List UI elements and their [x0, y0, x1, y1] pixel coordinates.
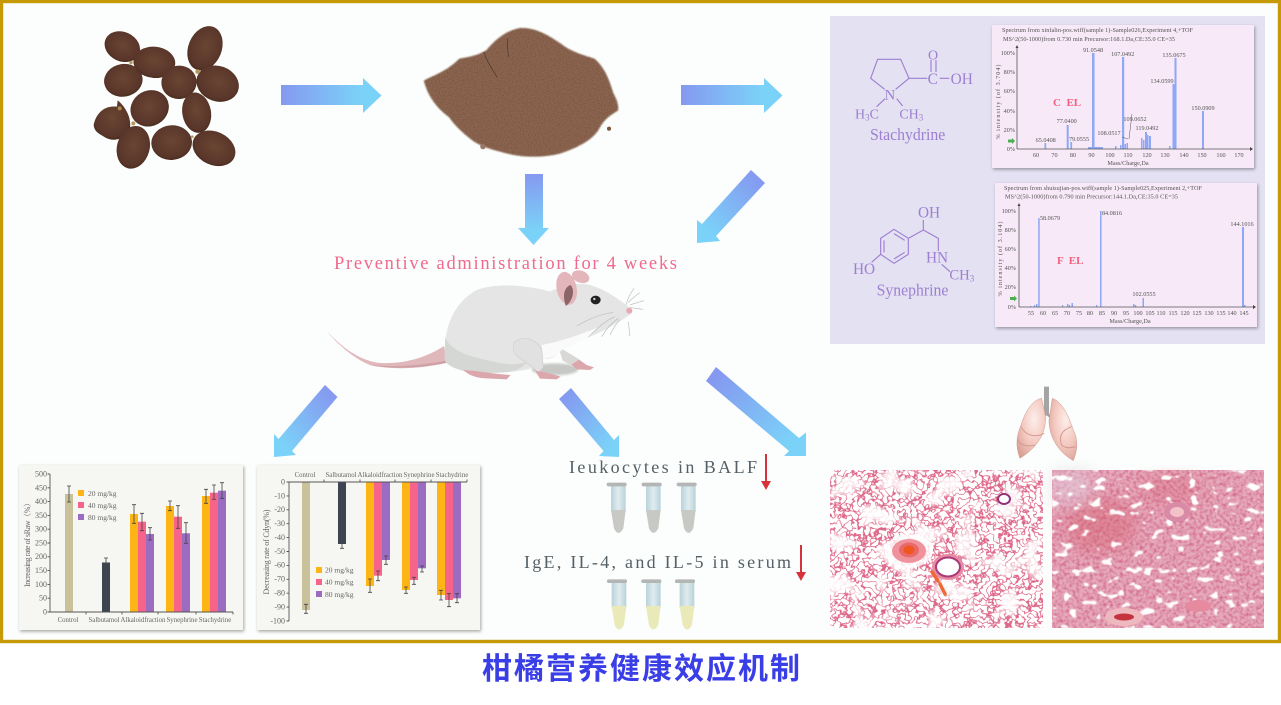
airway ring [932, 554, 964, 580]
mass spectrum: C EL: % intensity (of 3.704) [995, 64, 1002, 140]
mass spectrum: C EL: 134.0599 [1150, 78, 1174, 85]
mass spectrum: F EL: 145 [1239, 310, 1249, 317]
mass spectrum: C EL: 120 [1142, 152, 1152, 159]
mass spectrum: C EL: 100 [1105, 152, 1115, 159]
mass spectrum: C EL: 77.0400 [1057, 118, 1077, 125]
mass spectrum: F EL: 70 [1064, 310, 1070, 317]
mass spectrum: C EL: 80 [1070, 152, 1076, 159]
arrow: compounds to treatment [697, 170, 765, 243]
chart: increasing rate of sRaw: Control [58, 617, 78, 624]
mass spectrum: C EL: 135.0675 [1162, 52, 1186, 59]
mass spectrum: C EL: 119.0492 [1136, 125, 1158, 132]
mass spectrum: F EL: 85 [1099, 310, 1105, 317]
small vessels [932, 572, 945, 594]
mass spectrum: C EL: 91.0548 [1083, 47, 1103, 54]
chart: increasing rate of sRaw: Salbutamol [89, 617, 120, 624]
mass spectrum: F EL: 140 [1227, 310, 1237, 317]
chart: increasing rate of sRaw: 150 [35, 566, 47, 575]
chart: increasing rate of sRaw: Stachydrine [199, 617, 231, 624]
chart: decreasing rate of Cdyn: 0 [281, 478, 285, 486]
mass spectrum: F EL: 75 [1076, 310, 1082, 317]
chemical structure: Stachydrine [855, 48, 973, 144]
title: 柑橘营养健康效应机制 [482, 653, 800, 686]
chart: decreasing rate of Cdyn: -90 [274, 602, 285, 612]
chart: increasing rate of sRaw [19, 465, 243, 630]
mass spectrum: C EL: 65.0408 [1036, 137, 1056, 144]
illustration: laboratory rat [327, 268, 644, 379]
chart: decreasing rate of Cdyn: -30 [274, 519, 285, 528]
chemical structure: Synephrine: 3 [970, 274, 975, 284]
mass spectrum: F EL: Mass/Charge,Da [1109, 318, 1151, 325]
mass spectrum: C EL: 150 [1197, 152, 1207, 159]
mass spectrum: F EL: 125 [1192, 310, 1202, 317]
chemical structure: Stachydrine: 3 [865, 112, 870, 122]
chart: increasing rate of sRaw: 0 [43, 608, 47, 616]
bars: sRaw groups [65, 483, 226, 612]
mass spectrum: F EL: 95 [1123, 310, 1129, 317]
panel: compounds and mass spectra [830, 16, 1265, 344]
bronchiole top [1164, 502, 1190, 522]
arrow: rat to tubes [559, 388, 619, 457]
mass spectrum: C EL: 140 [1179, 152, 1189, 159]
mass spectrum: F EL: 90 [1111, 310, 1117, 317]
chart: decreasing rate of Cdyn: -60 [274, 560, 285, 570]
arrow: powder down to treatment [518, 174, 549, 245]
chemical structure: Stachydrine: N [885, 87, 896, 103]
legend: doses: 80 mg/kg [88, 513, 117, 522]
mass spectrum: F EL: 80 [1087, 310, 1093, 317]
chart: increasing rate of sRaw: 300 [35, 524, 47, 534]
arrow: powder to compounds [681, 78, 782, 113]
chemical structure: Stachydrine: 3 [919, 112, 924, 122]
chart: increasing rate of sRaw: Increasing rate of sRaw（%） [23, 499, 32, 587]
chemical structure: Stachydrine: OH [951, 71, 973, 88]
chart: decreasing rate of Cdyn: -50 [274, 547, 285, 556]
chart: increasing rate of sRaw: 250 [35, 538, 47, 548]
chart: decreasing rate of Cdyn: -20 [274, 505, 285, 514]
vessel with red lumen [892, 539, 926, 563]
mass spectrum: C EL: 20% [1004, 127, 1015, 134]
mass spectrum: F EL: % intensity (of 3.104) [997, 222, 1004, 296]
mass spectrum: C EL: C EL [1053, 97, 1081, 109]
legend: doses Cdyn: 80 mg/kg [325, 590, 354, 599]
image: brown powder pile [424, 28, 618, 157]
legend: doses: 40 mg/kg [88, 501, 117, 510]
mass spectrum: C EL: 130 [1160, 152, 1170, 159]
mass spectrum: F EL: 130 [1204, 310, 1214, 317]
chemical structure: Synephrine: OH [918, 205, 940, 222]
mass spectrum: C EL: 110 [1123, 152, 1133, 159]
mass spectrum: C EL: 150.0909 [1191, 105, 1215, 112]
chart: increasing rate of sRaw: Synephrine [167, 617, 197, 624]
mass spectrum: F EL: 105 [1145, 310, 1155, 317]
mass spectrum: F EL: 40% [1005, 265, 1016, 272]
mass spectrum: F EL: 102.0555 [1132, 291, 1156, 298]
chemical structure: Stachydrine: C [928, 71, 938, 88]
mass spectrum: C EL: 108.0517 [1097, 130, 1121, 137]
mass spectrum: C EL: Mass/Charge,Da [1107, 160, 1149, 167]
legend: doses Cdyn: 40 mg/kg [325, 578, 354, 586]
mass spectrum: F EL: F EL [1057, 255, 1084, 267]
mass spectrum: F EL [995, 183, 1257, 327]
chemical structure: Synephrine: HN [926, 249, 948, 266]
mass spectrum: F EL: 84.0816 [1102, 210, 1122, 217]
chemical structure: Stachydrine: O [928, 48, 938, 63]
mass spectrum: F EL: 65 [1052, 310, 1058, 317]
mass spectrum: F EL: MS^2(50-1000)from 0.790 min Precursor:144.1.Da,CE:35.0 CE=35 [1005, 194, 1178, 200]
arrow: seeds to powder [281, 78, 382, 113]
icon: lungs [1017, 387, 1077, 461]
mass spectrum: C EL: 160 [1216, 152, 1226, 159]
chart: decreasing rate of Cdyn: Stachydrine [436, 472, 468, 479]
mass spectrum: C EL: 107.0492 [1111, 51, 1134, 58]
chart: decreasing rate of Cdyn: -40 [274, 533, 285, 542]
chart: decreasing rate of Cdyn: -10 [274, 492, 285, 500]
mass spectrum: F EL: 20% [1005, 284, 1016, 291]
mass spectrum: C EL: Spectrum from xinfalin-pos.wiff(sample 1)-Sample026,Experiment 4,+TOF [1002, 27, 1194, 34]
icon: serum sample tubes [607, 579, 695, 629]
icon: red down arrow BALF [761, 454, 771, 490]
mass spectrum: C EL: 79.0555 [1069, 136, 1089, 143]
legend: doses Cdyn: 20 mg/kg [325, 566, 354, 574]
chart: increasing rate of sRaw: 350 [35, 511, 47, 520]
chemical structure: Stachydrine: H [855, 107, 865, 122]
chart: increasing rate of sRaw: 50 [39, 594, 47, 602]
chart: decreasing rate of Cdyn: Salbutamol [326, 472, 357, 479]
mass spectrum: C EL [992, 25, 1254, 168]
chart: decreasing rate of Cdyn: Decreasing rate of Cdyn(%) [262, 509, 271, 594]
chart: increasing rate of sRaw: 400 [35, 497, 47, 506]
chart: decreasing rate of Cdyn: Synephrine [404, 472, 434, 479]
text: leukocytes in BALF: Ieukocytes in BALF [569, 457, 757, 477]
mass spectrum: C EL: 60 [1033, 152, 1039, 159]
arrow: rat to lungs [706, 367, 806, 456]
mass spectrum: F EL: 55 [1028, 310, 1034, 317]
mass spectrum: F EL: Spectrum from shuisujian-pos.wiff(sample 1)-Sample025,Experiment 2,+TOF [1004, 185, 1203, 192]
mass spectrum: C EL: 60% [1004, 88, 1015, 95]
chart: decreasing rate of Cdyn: Alkaloidfraction [358, 472, 403, 479]
mass spectrum: F EL: 60 [1040, 310, 1046, 317]
mass spectrum: C EL: 40% [1004, 108, 1015, 115]
chart: decreasing rate of Cdyn [257, 465, 480, 630]
chart: decreasing rate of Cdyn: -70 [274, 574, 285, 584]
chemical structure: Synephrine: Synephrine [877, 281, 948, 300]
mass spectrum: C EL: 170 [1234, 152, 1244, 159]
vessel bottom [1105, 608, 1143, 626]
chemical structure: Synephrine [853, 205, 975, 300]
mass spectrum: F EL: 58.0679 [1040, 215, 1060, 222]
mass spectrum: F EL: 80% [1005, 227, 1016, 234]
mass spectrum: F EL: 60% [1005, 246, 1016, 253]
mass spectrum: F EL: 135 [1216, 310, 1226, 317]
chart: decreasing rate of Cdyn: -80 [274, 588, 285, 598]
mass spectrum: F EL: 115 [1168, 310, 1178, 317]
mass spectrum: C EL: 90 [1088, 152, 1095, 159]
upper right airway [998, 494, 1010, 504]
icon: red down arrow serum [796, 545, 806, 581]
mass spectrum: C EL: 0% [1007, 146, 1015, 153]
micrograph: inflamed lung tissue [1052, 470, 1264, 628]
mass spectrum: F EL: 110 [1156, 310, 1166, 317]
chart: increasing rate of sRaw: 200 [35, 552, 47, 561]
mass spectrum: F EL: 0% [1008, 304, 1016, 311]
mass spectrum: C EL: MS^2(50-1000)from 0.730 min Precursor:168.1.Da,CE:35.0 CE=35 [1003, 36, 1175, 43]
chart: increasing rate of sRaw: 450 [35, 484, 47, 492]
chart: decreasing rate of Cdyn: -100 [270, 616, 285, 626]
mass spectrum: C EL: 100% [1001, 50, 1015, 57]
legend: doses Cdyn [316, 566, 354, 599]
legend: doses [78, 489, 117, 522]
micrograph: normal lung tissue [830, 470, 1043, 628]
image: dried citrus seeds [94, 21, 244, 173]
chemical structure: Synephrine: HO [853, 261, 875, 278]
icon: BALF sample tubes [607, 483, 697, 533]
legend: doses: 20 mg/kg [88, 489, 117, 498]
mass spectrum: C EL: 109.0652 [1123, 116, 1147, 123]
chemical structure: Stachydrine: C [870, 107, 879, 122]
chemical structure: Synephrine: CH [949, 268, 970, 284]
mass spectrum: F EL: 100 [1133, 310, 1143, 317]
chart: increasing rate of sRaw: 100 [35, 580, 47, 589]
mass spectrum: F EL: 144.1016 [1230, 221, 1254, 228]
mass spectrum: F EL: 120 [1180, 310, 1190, 317]
text: IgE IL-4 IL-5 in serum: IgE, IL-4, and IL-5 in serum [524, 552, 791, 572]
chemical structure: Stachydrine: Stachydrine [870, 125, 945, 144]
bars: Cdyn groups [302, 482, 461, 613]
mass spectrum: C EL: 70 [1051, 152, 1058, 159]
arrow: rat to bar charts [274, 385, 338, 457]
heading: preventive administration: Preventive administration for 4 weeks [334, 254, 677, 274]
mass spectrum: C EL: 80% [1004, 69, 1015, 76]
chart: increasing rate of sRaw: 500 [35, 470, 47, 478]
chart: increasing rate of sRaw: Alkaloidfraction [121, 617, 166, 624]
mass spectrum: F EL: 100% [1002, 208, 1016, 215]
chemical structure: Stachydrine: CH [899, 107, 919, 122]
chart: decreasing rate of Cdyn: Control [295, 472, 315, 479]
